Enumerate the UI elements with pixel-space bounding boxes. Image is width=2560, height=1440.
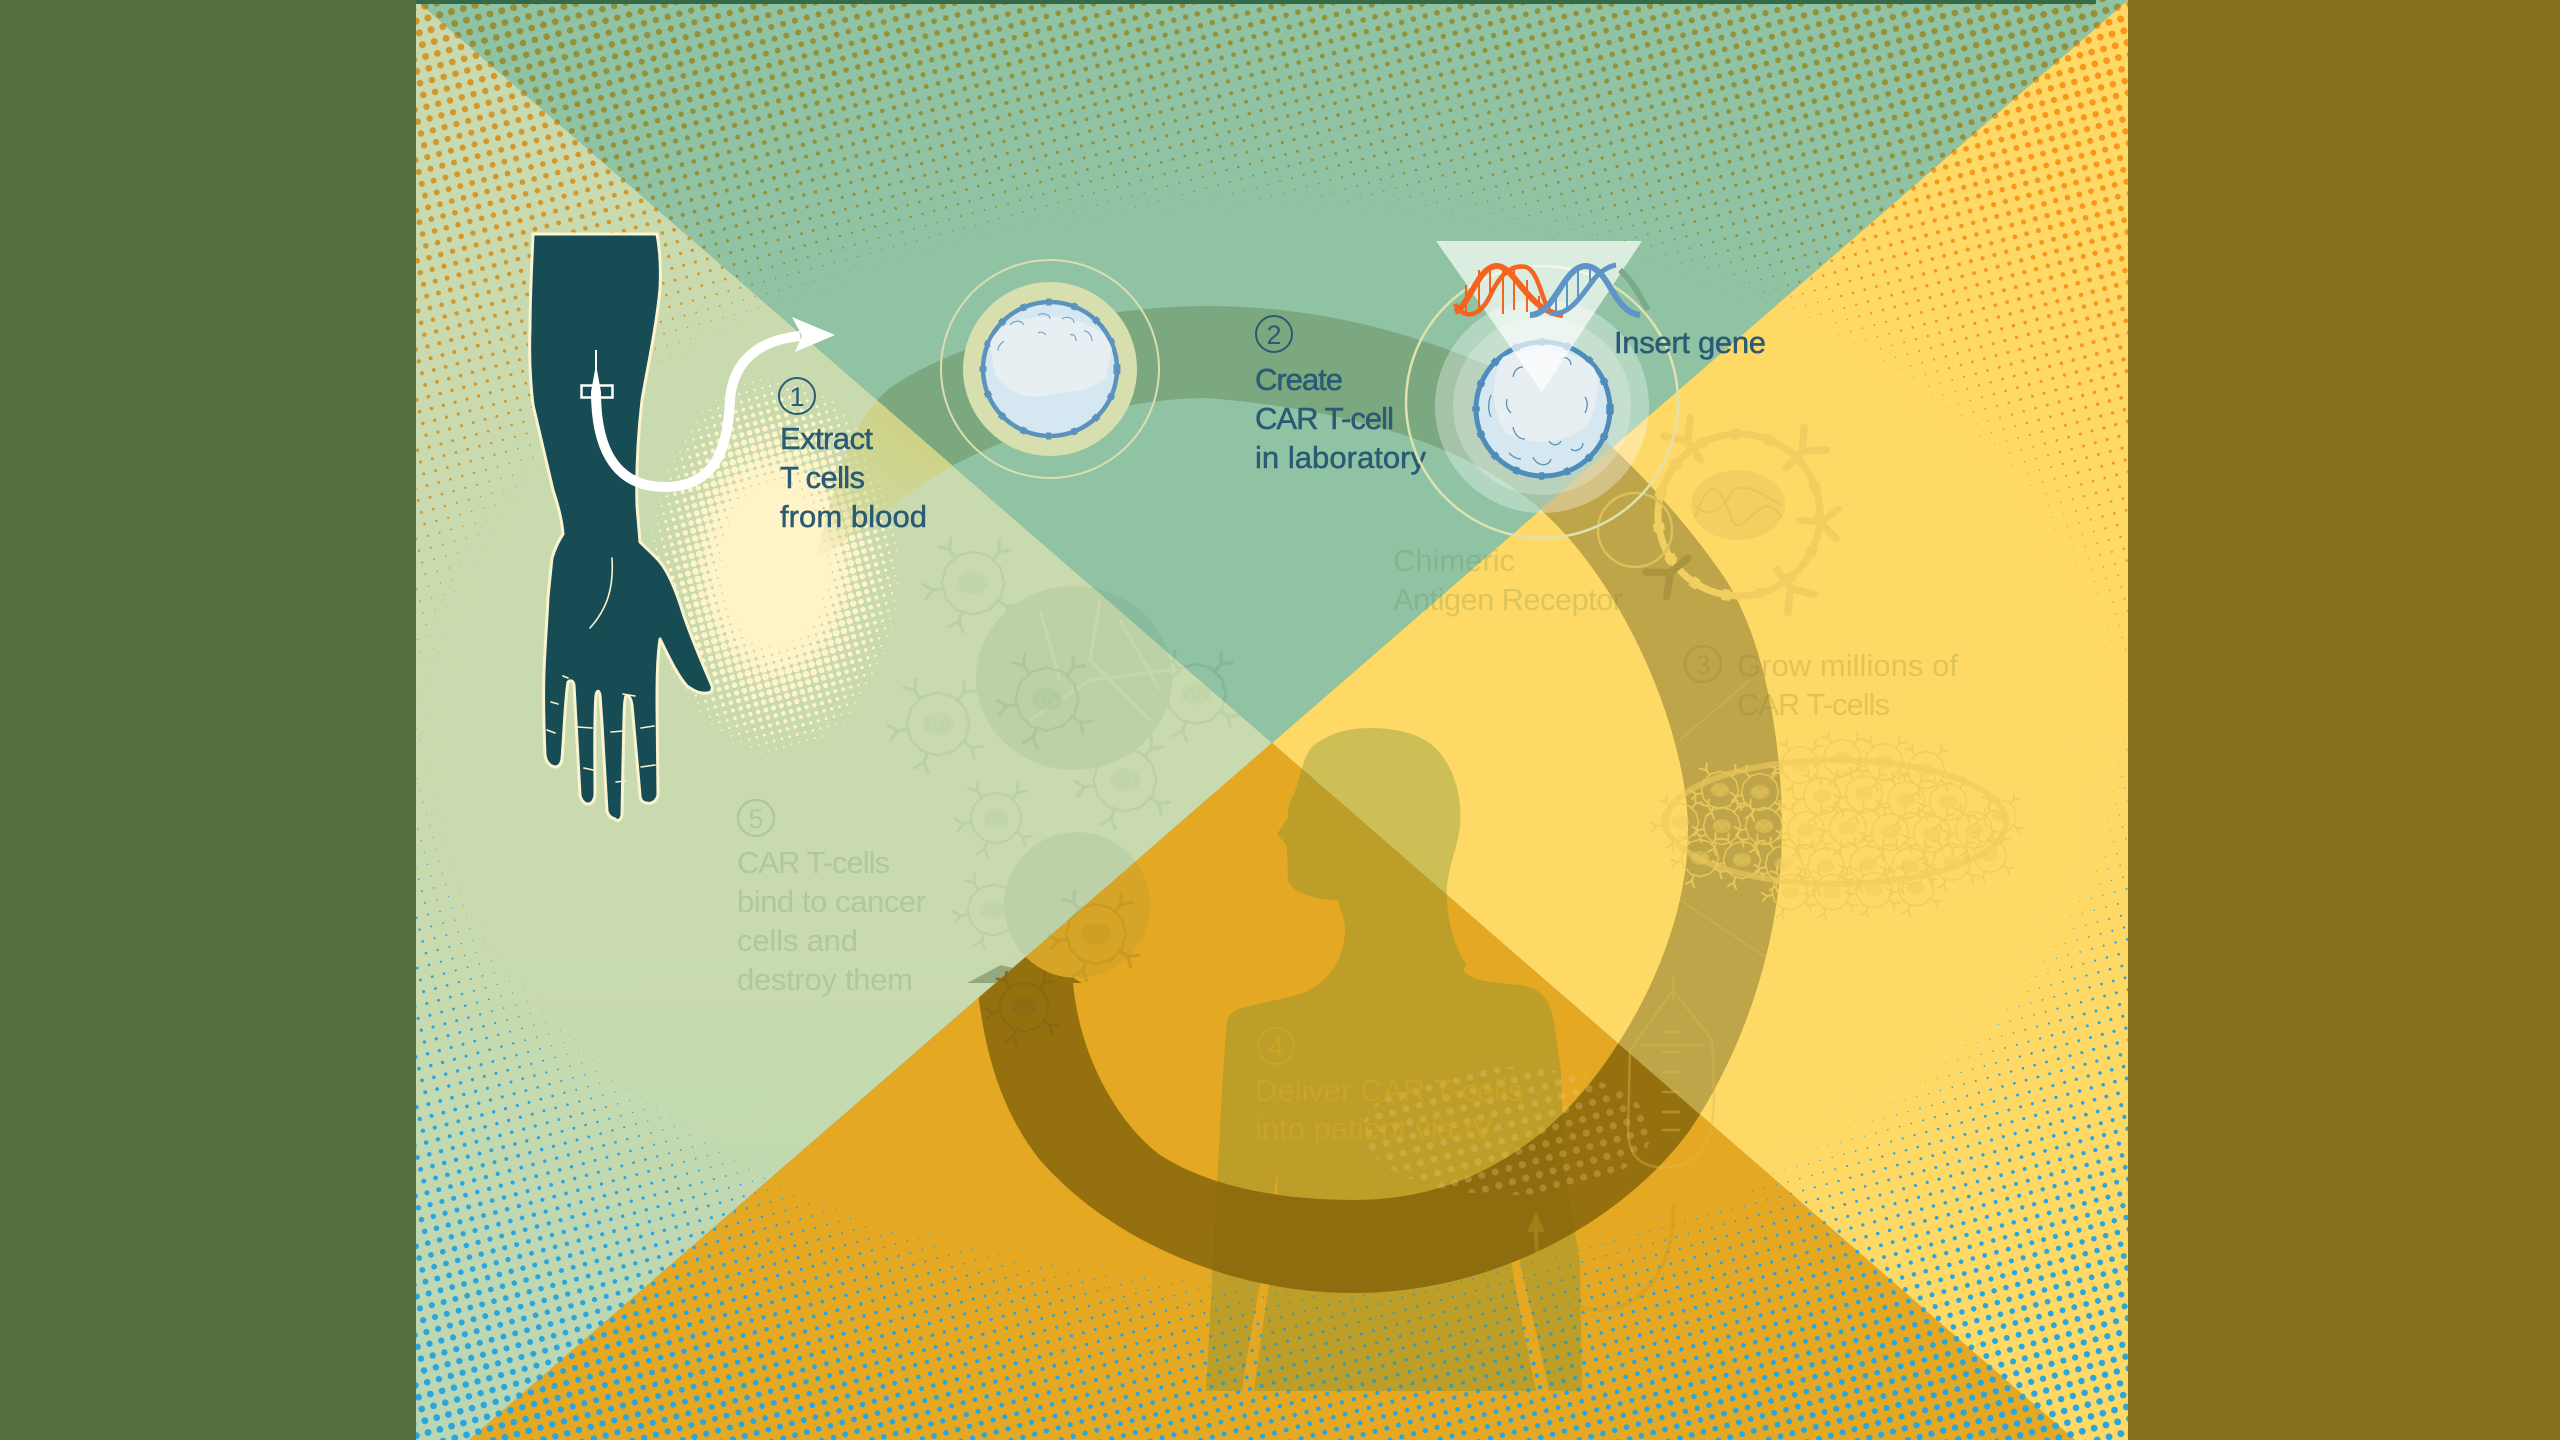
number 1: 1	[789, 382, 805, 412]
text: from blood	[780, 499, 927, 534]
step 5 cancer cells and CAR T-cells	[888, 538, 1239, 1045]
text	[1255, 362, 1426, 475]
text: CAR T-cells	[737, 845, 890, 880]
cream glow behind hand	[646, 368, 904, 761]
text	[780, 421, 927, 534]
text	[1737, 648, 1958, 722]
big CAR T-cell	[1598, 417, 1839, 613]
text: Create	[1255, 362, 1343, 397]
T-cell	[1075, 735, 1170, 829]
text: bind to cancer	[737, 884, 926, 919]
DNA orange	[1455, 266, 1563, 315]
number 1	[779, 378, 815, 414]
cancer cell with T-cell attack	[976, 586, 1172, 770]
receptors	[1646, 417, 1839, 613]
hand detail lines	[547, 558, 655, 782]
cell body	[983, 302, 1117, 436]
text: Deliver CAR T-cells	[1255, 1073, 1523, 1108]
gene insertion beam	[1436, 241, 1642, 392]
faint step 4 label	[1255, 1028, 1523, 1146]
left page margin	[0, 0, 417, 1440]
T cell before modification	[941, 260, 1159, 478]
number 2	[1256, 316, 1292, 352]
number 4	[1258, 1028, 1294, 1064]
process arc arrow	[819, 306, 1782, 1293]
T-cell	[1168, 657, 1240, 742]
number 3	[1685, 646, 1721, 682]
text: cells and	[737, 923, 858, 958]
top edge strip	[416, 0, 2096, 4]
background quadrants	[416, 0, 2128, 1440]
number 3: 3	[1695, 650, 1711, 680]
halftone dots	[416, 0, 2128, 1440]
cell colony	[1651, 732, 2023, 920]
text: into patient via IV	[1255, 1111, 1493, 1146]
cell body	[1476, 342, 1610, 476]
receptor detail ring	[1598, 493, 1672, 567]
faint label: Chimeric Antigen Receptor: Antigen Receptor	[1393, 582, 1623, 617]
engineered cell with rings	[1406, 241, 1766, 538]
petri dish of CAR T-cells	[1651, 680, 2023, 960]
T-cell	[923, 538, 1018, 632]
faint shadow helix	[1620, 270, 1648, 310]
text: CAR T-cells	[1737, 687, 1890, 722]
needle	[591, 350, 601, 392]
step 2 label	[1255, 316, 1426, 475]
right page margin	[2127, 0, 2560, 1440]
text: Extract	[780, 421, 873, 456]
text: in laboratory	[1255, 440, 1426, 475]
number 2: 2	[1266, 320, 1282, 350]
DNA blue	[1530, 265, 1640, 315]
faint label: Chimeric Antigen Receptor	[1393, 543, 1623, 617]
faint step 3 label	[1685, 646, 1958, 722]
faint halftone patch on patient	[1362, 1067, 1652, 1195]
text: Grow millions of	[1737, 648, 1958, 683]
number 5	[738, 800, 774, 836]
dish	[1666, 680, 2006, 960]
text	[1255, 1073, 1523, 1146]
patient silhouette	[1206, 728, 1582, 1391]
arrow head	[792, 317, 835, 352]
catheter tape	[582, 386, 612, 398]
shrinking cancer cell	[1004, 832, 1150, 981]
blood draw tube and arrow	[582, 317, 835, 487]
text: T cells	[780, 460, 865, 495]
label: insert gene: Insert gene	[1614, 325, 1766, 360]
nucleus with gene	[1691, 470, 1785, 540]
number 4: 4	[1268, 1032, 1284, 1062]
faint label: Chimeric Antigen Receptor: Chimeric	[1393, 543, 1515, 578]
text: CAR T-cell	[1255, 401, 1394, 436]
T-cell on green	[1172, 650, 1240, 715]
T-cell	[953, 874, 1029, 950]
text: destroy them	[737, 962, 913, 997]
faint step 5 label	[737, 800, 926, 997]
T-cell	[956, 782, 1032, 858]
step 1 label	[779, 378, 927, 534]
text	[737, 845, 926, 997]
number 5: 5	[748, 804, 764, 834]
IV bag and tube	[1527, 975, 1714, 1310]
T-cell	[888, 679, 983, 773]
T-cell in arrow	[985, 972, 1059, 1045]
arm and hand	[530, 234, 712, 820]
